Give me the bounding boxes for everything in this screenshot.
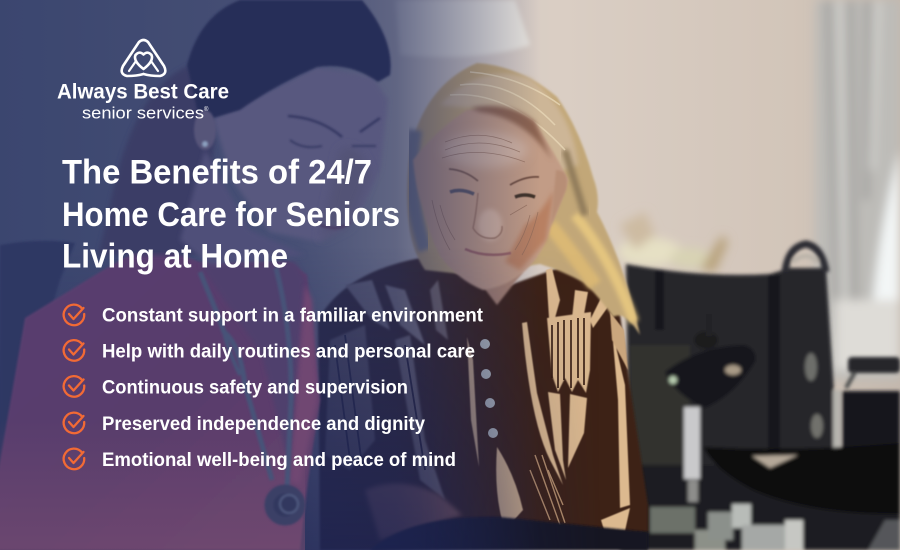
- curtain: [815, 0, 900, 380]
- registered mark: ®: [204, 106, 209, 113]
- hair back: [407, 63, 640, 335]
- blouse tan stripes: [467, 268, 630, 531]
- face: [413, 109, 568, 290]
- photo: senior woman: [318, 63, 648, 550]
- right ear: [551, 170, 567, 225]
- photo: nurse tinted by overlay: [0, 0, 391, 550]
- item: constant support: Constant support in a familiar environment: [102, 304, 483, 326]
- icon: triangle with heart: [122, 40, 165, 76]
- stethoscope: [200, 268, 301, 521]
- facial features: [288, 116, 380, 228]
- hands and book: [365, 484, 462, 540]
- sofa: [0, 241, 75, 480]
- ponytail: [98, 65, 215, 255]
- neck: [180, 150, 305, 265]
- benefits list: [64, 304, 483, 471]
- buttons: [480, 339, 498, 438]
- eyebrows and eyes: [449, 169, 539, 255]
- logo tagline: senior services: [82, 104, 204, 122]
- face: [213, 67, 388, 242]
- title: Home Care for Seniors: [62, 196, 400, 234]
- logo wordmark: Always Best Care: [57, 80, 229, 104]
- wheelchair: [620, 244, 900, 550]
- item: daily routines: Help with daily routines and personal care: [102, 340, 475, 362]
- lamp shade: [395, 0, 530, 57]
- neck: [478, 272, 523, 305]
- wrinkles: [432, 135, 538, 255]
- item: well-being: Emotional well-being and peace of mind: [102, 449, 456, 471]
- hair: [187, 0, 391, 145]
- blouse: [318, 258, 648, 550]
- item: independence: Preserved independence and dignity: [102, 413, 425, 435]
- title: [62, 154, 400, 276]
- title: The Benefits of 24/7: [62, 154, 372, 192]
- flowers: [618, 212, 728, 272]
- title: Living at Home: [62, 238, 288, 276]
- scrubs: [0, 243, 320, 550]
- ear and earring: [194, 110, 216, 150]
- face shadow under fringe: [470, 106, 552, 160]
- item: safety: Continuous safety and supervision: [102, 376, 408, 398]
- logo: [57, 40, 229, 122]
- scrub collar panel: [200, 262, 305, 470]
- blouse left leaf pattern: [325, 280, 448, 500]
- cheek warmth: [505, 190, 554, 270]
